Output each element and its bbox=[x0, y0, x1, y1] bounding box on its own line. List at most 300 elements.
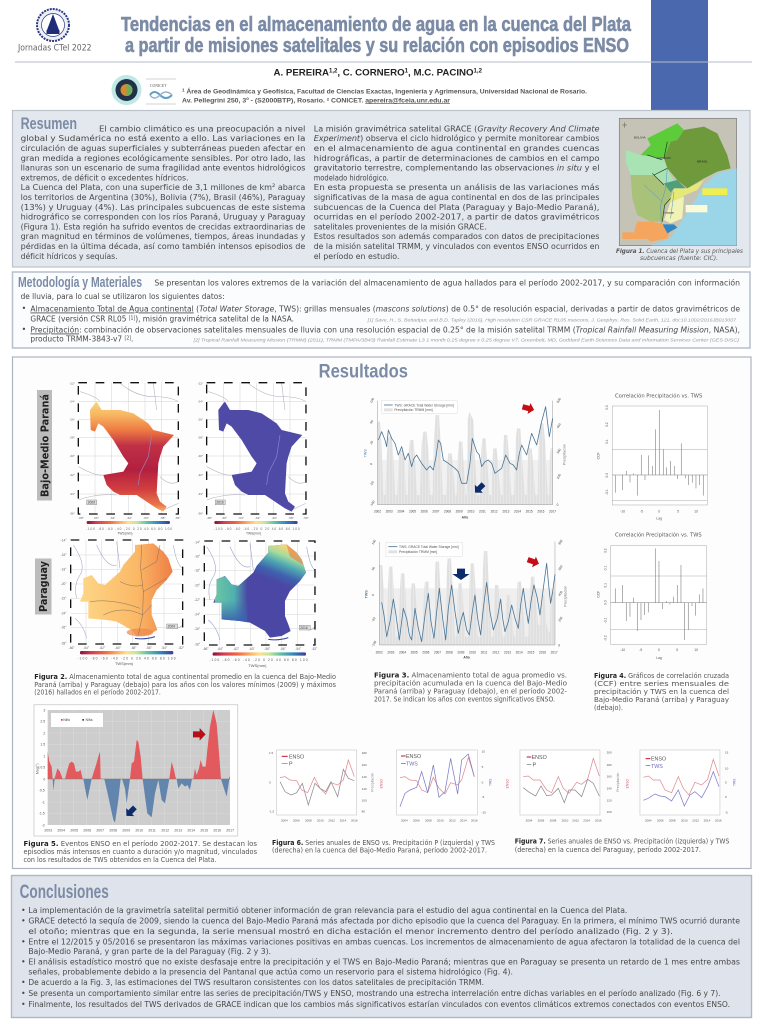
map: Paraguay 2009: -20° bbox=[61, 582, 67, 586]
map: Bajo-Medio Paraná 2009: -56° bbox=[175, 516, 181, 520]
chart: ENSO vs P Bajo-Medio Paraná: 180 bbox=[362, 751, 367, 755]
map: Bajo-Medio Paraná 2009: -100 -80 -60 -40 -20 0 20 40 60 80 100 bbox=[86, 527, 172, 531]
chart: figure 3 Paraguay: -100 bbox=[371, 640, 377, 647]
chart: ENSO vs TWS Bajo-Medio Paraná: 2012 bbox=[449, 819, 456, 823]
authors: , M.C. PACINO bbox=[408, 68, 474, 78]
chart: figure 5 ENSO events: 2015 bbox=[200, 828, 208, 832]
panel: Conclusiones bbox=[12, 876, 752, 1018]
text column 2: ocurridas en el período 2002-2017, a partir de datos gravimétricos bbox=[314, 212, 600, 222]
chart: figure 3 Paraguay: 2017 bbox=[551, 650, 558, 654]
TWS axis labels for the upper maps bbox=[117, 532, 261, 536]
map: Paraguay 2016: -22° bbox=[194, 598, 201, 602]
map: Bajo-Medio Paraná 2016: -22° bbox=[198, 381, 204, 385]
caption: figure 7 bbox=[515, 837, 730, 854]
legend bbox=[386, 542, 462, 557]
map: Bajo-Medio Paraná 2016: -66° bbox=[222, 516, 228, 520]
chart: figure 4 Bajo-Medio Paraná: 5 bbox=[677, 509, 679, 513]
chart: ENSO vs P Bajo-Medio Paraná: 160 bbox=[362, 763, 367, 767]
caption: figure 3: 2017. Se indican los años con eventos significativos ENSO. bbox=[374, 694, 555, 704]
map: Paraguay 2009: -22° bbox=[61, 597, 67, 601]
chart: ENSO vs TWS Bajo-Medio Paraná: 2014 bbox=[460, 819, 467, 823]
chart: figure 4 Bajo-Medio Paraná: 10 bbox=[694, 509, 698, 513]
heading: Resumen: Resumen bbox=[21, 114, 77, 133]
chart: figure 3 Paraguay: 200 bbox=[557, 616, 564, 622]
chart: figure 4 Bajo-Medio Paraná: 0.3 bbox=[605, 405, 609, 410]
map: Bajo-Medio Paraná 2009: -22° bbox=[69, 381, 76, 385]
chart: figure 3 Paraguay: -50 bbox=[371, 616, 377, 622]
chart: ENSO vs TWS Bajo-Medio Paraná: TWS bbox=[406, 761, 418, 767]
chart: ENSO vs P Bajo-Medio Paraná: 1.5 bbox=[269, 751, 273, 755]
chart: figure 5 ENSO events: 2011 bbox=[148, 828, 156, 832]
chart: ENSO vs P Paraguay: 2016 bbox=[595, 819, 602, 823]
map: Paraguay 2016: -24° bbox=[194, 613, 201, 617]
panel: Resultados bbox=[12, 357, 751, 868]
chart: figure 4 Paraguay: -0.1 bbox=[604, 617, 608, 623]
chart: figure 3 Paraguay: 0 bbox=[371, 593, 375, 597]
chart: ENSO vs P Bajo-Medio Paraná: 80 bbox=[362, 810, 365, 814]
chart: ENSO vs P Paraguay: 160 bbox=[607, 774, 612, 778]
title: Tendencias en el almacenamiento de agua en la cuenca del Plata bbox=[121, 14, 632, 36]
chart: figure 5 ENSO events: 2005 bbox=[70, 828, 78, 832]
bullet list: conclusions: • bbox=[21, 958, 26, 967]
affiliation: Av. Pellegrini 250, 3º - (S2000BTP), Rosario. ² CONICET. apereira@fceia.unr.edu.ar bbox=[182, 97, 450, 104]
chart: figure 3 Paraguay: 2005 bbox=[411, 650, 418, 654]
text column 1: (Figura 1). Esta región ha sufrido eventos de crecidas extraordinarias de bbox=[21, 221, 305, 231]
chart: ENSO vs P Bajo-Medio Paraná: P bbox=[289, 762, 293, 768]
legend: Precipitación TRMM [mm] bbox=[399, 550, 437, 554]
references: [1] Save, H., S. Bettadpur, and B.D. Tapley (2016), High resolution CSR GRACE RL05 mascons, J. Geophys. Res. Solid Earth, 121, doi:10.1002/2016JB013007 bbox=[366, 318, 736, 322]
map: Paraguay 2009: -54° bbox=[161, 646, 168, 650]
chart: ENSO vs TWS Paraguay: 2006 bbox=[657, 819, 664, 823]
chart: ENSO vs TWS Paraguay: ENSO bbox=[625, 778, 629, 788]
map: Bajo-Medio Paraná 2016: -100 -80 -60 -40 -20 0 20 40 60 80 100 bbox=[214, 527, 300, 531]
chart: figure 3 Paraguay: 2014 bbox=[516, 650, 523, 654]
chart: figure 3 Bajo-Medio Paraná: 2004 bbox=[397, 510, 405, 514]
legend: Niño bbox=[63, 718, 70, 722]
blue block at top right bbox=[651, 0, 708, 110]
chart: ENSO vs TWS Bajo-Medio Paraná: ENSO bbox=[406, 754, 421, 760]
map: Paraguay 2016: -100 -80 -60 -40 -20 0 20 40 60 80 100 bbox=[209, 658, 308, 662]
map: Paraguay 2009: -64° bbox=[83, 646, 90, 650]
heading: Resultados: Resultados bbox=[319, 362, 408, 382]
chart: figure 5 ENSO events: -0.5 bbox=[39, 789, 45, 793]
chart: figure 3 Bajo-Medio Paraná: 300 bbox=[556, 448, 562, 454]
map: Paraguay 2016: -26° bbox=[194, 627, 201, 631]
arrow: La Niña bbox=[122, 803, 139, 820]
chart: figure 3 Paraguay: 2009 bbox=[457, 650, 465, 654]
chart: figure 5 ENSO events: 1 bbox=[43, 754, 45, 758]
text column 1: extremos, de déficit o excedentes hídricos. bbox=[21, 172, 189, 182]
map: Bajo-Medio Paraná 2009: -30° bbox=[69, 454, 76, 458]
chart: figure 3 Bajo-Medio Paraná: 2011 bbox=[479, 510, 486, 514]
chart: ENSO vs TWS Paraguay: -5 bbox=[725, 810, 728, 814]
bullet list: data sources: Precipitación: combinación de observaciones satelitales mensuales de lluvia con una resolución espacial de 0.25° de la misión satelital TRMM (Tropical Rainfall Measuring Mission, NASA), bbox=[30, 324, 740, 334]
chart: ENSO vs P Paraguay: 2014 bbox=[583, 819, 590, 823]
title bbox=[121, 14, 632, 57]
text column 1: gran magnitud en términos de volúmenes, tiempos, áreas inundadas y bbox=[21, 231, 306, 241]
map: Paraguay 2016: -64° bbox=[217, 647, 224, 651]
bullet list: conclusions: • bbox=[21, 906, 26, 915]
map: Bajo-Medio Paraná 2016: -58° bbox=[288, 516, 295, 520]
map: Paraguay 2009: -14° bbox=[61, 539, 67, 543]
authors: A. PEREIRA bbox=[274, 68, 328, 78]
chart: figure 5 ENSO events: 0.5 bbox=[40, 766, 45, 770]
caption: figure 2: (2016) hallados en el período 2002-2017. bbox=[34, 688, 161, 697]
map: Paraguay 2009: -60° bbox=[115, 646, 122, 650]
intro text: Se presentan los valores extremos de la variación del almacenamiento de agua hallados para el período 2002-2017, y su comparación con información bbox=[154, 278, 740, 288]
map: Bajo-Medio Paraná 2016: -30° bbox=[198, 454, 204, 458]
map: Paraguay 2016: -58° bbox=[264, 647, 271, 651]
text column 1: (13%) y Uruguay (4%). Las principales subcuencas de este sistema bbox=[21, 202, 305, 212]
text column 2 bbox=[314, 123, 600, 261]
chart: figure 4 Paraguay: 0.1 bbox=[604, 566, 608, 570]
bullet list: data sources: [2] bbox=[125, 336, 131, 342]
chart: ENSO vs TWS Bajo-Medio Paraná: ENSO bbox=[379, 778, 383, 788]
chart: ENSO vs TWS Paraguay: 2010 bbox=[681, 819, 688, 823]
bullet list: data sources: Almacenamiento Total de Agua continental (Total Water Storage, TWS): grillas mensuales (mascons solutions) de 0.5° de resolución espacial, derivadas a partir de datos gravimétricos de bbox=[30, 304, 740, 314]
text column 2: significativas de la masa de agua continental en dos de las principales bbox=[314, 192, 600, 202]
chart: ENSO vs TWS Paraguay: 2012 bbox=[692, 819, 699, 823]
chart: figure 4 Paraguay: -5 bbox=[639, 648, 642, 652]
legend bbox=[51, 713, 103, 727]
arrow: minimum bbox=[452, 569, 470, 580]
chart: figure 3 Bajo-Medio Paraná: -50 bbox=[369, 480, 375, 486]
authors: 1,2 bbox=[474, 68, 483, 74]
chart: ENSO vs TWS Paraguay: 10 bbox=[725, 766, 729, 770]
chart: ENSO vs P Bajo-Medio Paraná bbox=[269, 750, 374, 823]
intro text: de lluvia, para lo cual se utilizaron los siguientes datos: bbox=[21, 291, 225, 301]
chart: ENSO vs P Bajo-Medio Paraná: 2010 bbox=[317, 819, 324, 823]
chart: figure 4 Bajo-Medio Paraná: 0 bbox=[658, 509, 660, 513]
arrow: maximum bbox=[526, 554, 541, 569]
text column 2: subcuencas de la Cuenca del Plata (Paraguay y Bajo-Medio Paraná), bbox=[314, 202, 600, 212]
map: Paraguay 2016: -62° bbox=[233, 647, 240, 651]
bullet list: conclusions: Se presenta un comportamiento similar entre las series de precipitación/TWS y ENSO, mostrando una estrecha interrelación entre dichas variables en el período analizado (Fig. 6 y 7). bbox=[28, 988, 721, 998]
chart: figure 3 Paraguay: 2011 bbox=[481, 650, 488, 654]
map: Paraguay 2016: 2016 bbox=[300, 626, 308, 630]
legend: TWS: GRACE Total Water Storage [mm] bbox=[394, 403, 454, 407]
chart: figure 3 Bajo-Medio Paraná: 2009 bbox=[456, 510, 463, 514]
chart: ENSO vs TWS Bajo-Medio Paraná: -5 bbox=[482, 795, 485, 799]
chart: figure 3 Bajo-Medio Paraná: 2005 bbox=[409, 510, 416, 514]
bullet list: data sources: producto TRMM-3843-v7 bbox=[30, 334, 131, 344]
chart: figure 3 Paraguay: 2007 bbox=[434, 650, 441, 654]
map: Paraguay 2009: 2009 bbox=[168, 625, 175, 629]
chart: figure 5 ENSO events: 2.5 bbox=[40, 720, 45, 724]
chart: figure 3 Bajo-Medio Paraná: 2003 bbox=[386, 510, 393, 514]
chart: figure 3 Bajo-Medio Paraná: 50 bbox=[369, 419, 374, 424]
heading: Conclusiones: Conclusiones bbox=[20, 882, 109, 903]
bullet list: conclusions: De acuerdo a la Fig. 3, las estimaciones del TWS resultaron consistentes con los datos satelitales de precipitación TRMM. bbox=[28, 977, 484, 987]
chart: ENSO vs P Bajo-Medio Paraná: 140 bbox=[362, 775, 367, 779]
chart: figure 3 Paraguay: 2002 bbox=[376, 650, 383, 654]
chart: figure 3 Bajo-Medio Paraná: 100 bbox=[369, 397, 375, 404]
chart: ENSO vs TWS Paraguay: TWS bbox=[733, 778, 737, 786]
chart: ENSO vs P Paraguay: 2006 bbox=[538, 819, 545, 823]
chart: ENSO vs P Paraguay: 200 bbox=[607, 750, 612, 754]
chart: figure 4 Bajo-Medio Paraná: 0.1 bbox=[605, 439, 609, 444]
caption: figure 1: subcuencas (fuente: CIC). bbox=[640, 254, 718, 262]
TWS axis labels for the upper maps: TWS(mm) bbox=[117, 532, 132, 536]
chart: figure 4 Bajo-Medio Paraná: CCF bbox=[596, 452, 600, 459]
text column 2: en el almacenamiento de agua continental en grandes cuencas bbox=[314, 143, 600, 153]
chart: ENSO vs P Paraguay: 2004 bbox=[526, 819, 533, 823]
chart: figure 3 Paraguay: 2010 bbox=[469, 650, 476, 654]
chart: figure 3 Bajo-Medio Paraná: 25 bbox=[369, 440, 374, 445]
legend: TWS: GRACE Total Water Storage [mm] bbox=[399, 545, 459, 549]
caption: figure 4 bbox=[594, 671, 730, 712]
caption: figure 6: Figura 6. Series anuales de ENSO vs. Precipitación P (izquierda) y TWS bbox=[272, 838, 495, 847]
chart: figure 5 ENSO events: 2004 bbox=[57, 828, 65, 832]
chart: figure 3 Paraguay: 2003 bbox=[387, 650, 395, 654]
chart: ENSO vs P Bajo-Medio Paraná: -1.5 bbox=[269, 810, 274, 814]
text column 1 bbox=[21, 123, 306, 261]
chart: figure 3 Paraguay: 2013 bbox=[504, 650, 511, 654]
chart: ENSO vs TWS Bajo-Medio Paraná: 5 bbox=[482, 765, 484, 769]
chart: ENSO vs P Paraguay bbox=[505, 750, 620, 823]
text column 1: déficit hídricos y sequías. bbox=[21, 251, 118, 261]
chart: figure 5 ENSO events bbox=[34, 705, 238, 836]
chart: figure 4 Bajo-Medio Paraná: 0.2 bbox=[605, 422, 609, 427]
chart: figure 5 ENSO events: 2009 bbox=[122, 828, 130, 832]
chart: ENSO vs P Paraguay: 2008 bbox=[550, 819, 557, 823]
chart: figure 4 Paraguay: -0.2 bbox=[604, 635, 608, 641]
logo: CONICET bbox=[146, 79, 176, 104]
chart: figure 3 Bajo-Medio Paraná: Año bbox=[462, 516, 468, 520]
chart: figure 4 Paraguay: 0.0 bbox=[604, 600, 608, 605]
chart: figure 3 Bajo-Medio Paraná: -100 bbox=[369, 499, 376, 507]
map: Cuenca del Plata sub-basins: Uruguay bbox=[664, 210, 675, 214]
chart: figure 4 Bajo-Medio Paraná: -0.1 bbox=[605, 489, 609, 495]
chart: figure 4 Paraguay: CCF bbox=[596, 591, 600, 598]
bullet list: conclusions: GRACE detectó la sequía de 2009, siendo la cuenca del Bajo-Medio Paraná más afectada por dicho episodio que la cuenca del Paraguay. En la primera, el mínimo TWS ocurrió durante bbox=[28, 916, 740, 926]
text column 1: los territorios de Argentina (30%), Bolivia (7%), Brasil (46%), Paraguay bbox=[21, 192, 306, 202]
map: Paraguay 2009: -58° bbox=[131, 646, 137, 650]
chart: figure 5 ENSO events: 2007 bbox=[96, 828, 104, 832]
map: Bajo-Medio Paraná 2009: -68° bbox=[78, 516, 85, 520]
map: Paraguay 2016: -60° bbox=[249, 647, 256, 651]
map: Bajo-Medio Paraná 2016: -26° bbox=[198, 417, 204, 421]
caption: figure 2: Paraná (arriba) y Paraguay (debajo) para los años con los valores mínimos (2009) y máximos bbox=[34, 680, 336, 689]
chart: ENSO vs P Bajo-Medio Paraná: 2014 bbox=[340, 819, 347, 823]
text column 2: hidrográficas, a partir de determinaciones de cambios en el campo bbox=[314, 153, 600, 163]
map: Bajo-Medio Paraná 2009: -36° bbox=[69, 511, 76, 515]
chart: ENSO vs P Paraguay: ENSO bbox=[505, 778, 509, 788]
chart: ENSO vs P Paraguay: 180 bbox=[607, 763, 612, 767]
chart: figure 4 Paraguay: Correlación Precipitación vs. TWS bbox=[615, 532, 702, 539]
map: Paraguay 2009: -62° bbox=[99, 646, 106, 650]
chart: figure 3 Bajo-Medio Paraná: Precipitación bbox=[562, 444, 566, 465]
chart: ENSO vs P Bajo-Medio Paraná: 2016 bbox=[351, 819, 358, 823]
chart: figure 4 Paraguay bbox=[596, 532, 707, 660]
bullet list: data sources: ), misión gravimétrica satelital de la NASA. bbox=[135, 314, 294, 324]
chart: figure 3 Paraguay: 2008 bbox=[446, 650, 453, 654]
map: Bajo-Medio Paraná 2016: -36° bbox=[198, 511, 204, 515]
chart: ENSO vs P Paraguay: 100 bbox=[607, 810, 612, 814]
map: Cuenca del Plata sub-basins bbox=[619, 118, 737, 246]
caption: figure 5: Figura 5. Eventos ENSO en el período 2002-2017. Se destacan los bbox=[24, 839, 257, 848]
authors: 1,2 bbox=[329, 68, 338, 74]
chart: ENSO vs TWS Paraguay: 15 bbox=[725, 750, 729, 754]
bullet list: data sources: . bbox=[131, 334, 133, 344]
chart: figure 3 Bajo-Medio Paraná: 0 bbox=[369, 462, 374, 466]
map: Paraguay 2016: -28° bbox=[194, 642, 201, 646]
chart: figure 5 ENSO events: 2003 bbox=[44, 828, 52, 832]
bullet list: data sources: [1] bbox=[129, 316, 135, 322]
map: Bajo-Medio Paraná 2016: -68° bbox=[207, 516, 213, 520]
chart: ENSO vs TWS Bajo-Medio Paraná bbox=[379, 750, 493, 823]
chart: figure 4 Paraguay: 5 bbox=[676, 648, 678, 652]
chart: figure 5 ENSO events: 2012 bbox=[161, 828, 169, 832]
text column 1: pérdidas en la última década, así como también intensos episodios de bbox=[21, 241, 305, 251]
map: Bajo-Medio Paraná 2009: -34° bbox=[69, 492, 76, 496]
chart: ENSO vs TWS Bajo-Medio Paraná: 2016 bbox=[471, 819, 478, 823]
map: Bajo-Medio Paraná 2009: -32° bbox=[69, 473, 76, 477]
chart: figure 4 Bajo-Medio Paraná: 0.0 bbox=[605, 473, 609, 478]
chart: ENSO vs P Bajo-Medio Paraná: 2006 bbox=[293, 819, 300, 823]
label: Paraguay bbox=[35, 558, 52, 614]
chart: figure 3 Paraguay: 2006 bbox=[422, 650, 430, 654]
chart: ENSO vs TWS Bajo-Medio Paraná: TWS bbox=[489, 778, 493, 786]
caption: figure 1: Figura 1. Cuenca del Plata y sus principales bbox=[616, 247, 744, 255]
chart: figure 5 ENSO events: 2013 bbox=[174, 828, 182, 832]
header bbox=[15, 9, 752, 105]
caption: figure 4: precipitación y TWS en la cuenca del bbox=[594, 687, 729, 696]
chart: figure 4 Bajo-Medio Paraná bbox=[596, 392, 707, 521]
bullet list: conclusions: Finalmente, los resultados del TWS derivados de GRACE indican que los cambios más significativos estarían vinculados con eventos climáticos extremos conectados con eventos ENSO. bbox=[28, 1000, 730, 1009]
bullet list: conclusions: • bbox=[21, 937, 26, 946]
chart: figure 4 Paraguay: 10 bbox=[694, 648, 698, 652]
chart: ENSO vs P Paraguay: 140 bbox=[607, 786, 612, 790]
chart: figure 4 Bajo-Medio Paraná: -10 bbox=[620, 509, 625, 513]
chart: ENSO vs TWS Paraguay: 2004 bbox=[645, 819, 652, 823]
chart: ENSO vs P Bajo-Medio Paraná: Precipitación bbox=[370, 772, 374, 792]
map: Bajo-Medio Paraná 2009: -64° bbox=[110, 516, 116, 520]
text column 1: gran medida a regiones ecológicamente sensibles. Por otro lado, las bbox=[21, 153, 305, 163]
bullet list: conclusions: Bajo-Medio Paraná, y gran parte de la del Paraguay (Fig. 2 y 3). bbox=[28, 947, 271, 956]
chart: figure 4 Paraguay: 0.2 bbox=[604, 548, 608, 553]
chart: ENSO vs P Bajo-Medio Paraná: 0 bbox=[269, 780, 271, 784]
bullet list: data sources: • bbox=[22, 324, 26, 334]
chart: figure 3 Bajo-Medio Paraná: 2017 bbox=[549, 510, 556, 514]
chart: figure 4 Paraguay: 0.1 bbox=[604, 583, 608, 588]
caption: figure 7: (derecha) en la cuenca del Paraguay, período 2002-2017. bbox=[515, 845, 701, 854]
map: Bajo-Medio Paraná 2009: -58° bbox=[160, 516, 166, 520]
chart: figure 5 ENSO events: 1.5 bbox=[40, 743, 45, 747]
map: Paraguay 2009: -56° bbox=[146, 646, 153, 650]
heading: Metodología y Materiales: Metodología y Materiales bbox=[18, 274, 142, 291]
chart: figure 3 Paraguay: 800 bbox=[557, 539, 564, 545]
bullet list: conclusions bbox=[21, 905, 740, 1009]
caption: figure 4: (CCF) entre series mensuales de bbox=[594, 679, 730, 688]
chart: ENSO vs P Bajo-Medio Paraná: 2004 bbox=[281, 819, 288, 823]
map: Bajo-Medio Paraná 2016: -64° bbox=[238, 516, 245, 520]
maps: Paraguay TWS 2009 and 2016 bbox=[61, 532, 320, 668]
chart: figure 3 Bajo-Medio Paraná: 2002 bbox=[374, 510, 381, 514]
bullet list: conclusions: La implementación de la gravimetría satelital permitió obtener información de gran relevancia para el estudio del agua continental en la Cuenca del Plata. bbox=[28, 905, 627, 915]
caption: figure 4: (debajo). bbox=[594, 703, 623, 712]
map: Bajo-Medio Paraná 2009: -24° bbox=[69, 399, 76, 403]
map: Paraguay 2009: -16° bbox=[61, 553, 67, 557]
panel: Resumen bbox=[12, 110, 750, 267]
chart: figure 3 Bajo-Medio Paraná: 2008 bbox=[444, 510, 451, 514]
legend: Niña bbox=[86, 718, 93, 722]
chart: ENSO vs P Paraguay: 2010 bbox=[562, 819, 569, 823]
chart: ENSO vs TWS Paraguay bbox=[625, 750, 737, 823]
maps: Bajo-Medio Paraná TWS 2009 and 2016 bbox=[69, 381, 310, 531]
map: Paraguay 2016: -14° bbox=[194, 540, 201, 544]
label: Bajo-Medio Paraná: Bajo-Medio Paraná bbox=[40, 394, 52, 497]
chart: figure 3 Bajo-Medio Paraná: 200 bbox=[556, 473, 562, 480]
chart: figure 4 Bajo-Medio Paraná: -5 bbox=[640, 509, 643, 513]
map: Paraguay 2016: -56° bbox=[280, 647, 287, 651]
caption: figure 4: Bajo-Medio Paraná (arriba) y Paraguay bbox=[594, 695, 730, 704]
label: Paraguay: Paraguay bbox=[38, 561, 50, 612]
caption: figure 3: precipitación acumulada en la cuenca del Bajo-Medio bbox=[374, 678, 567, 688]
map: Paraguay 2009: -24° bbox=[61, 611, 67, 615]
chart: figure 4 Bajo-Medio Paraná: Lag bbox=[656, 517, 662, 521]
bullet list: conclusions: señales, probablemente debido a la presencia del Pantanal que actúa como un reservorio para el sistema hidrológico (Fig. 4). bbox=[28, 966, 513, 976]
bullet list: data sources: • bbox=[22, 303, 26, 313]
text column 1: La Cuenca del Plata, con una superficie de 3,1 millones de km² abarca bbox=[21, 182, 305, 192]
chart: ENSO vs TWS Bajo-Medio Paraná: 2010 bbox=[437, 819, 444, 823]
title: a partir de misiones satelitales y su relación con episodios ENSO bbox=[125, 35, 629, 57]
arrow: minimum bbox=[471, 480, 488, 497]
chart: ENSO vs P Bajo-Medio Paraná: 100 bbox=[362, 798, 367, 802]
caption: figure 5 bbox=[24, 839, 257, 864]
map: Bajo-Medio Paraná 2016: -28° bbox=[198, 436, 204, 440]
intro text bbox=[21, 278, 740, 301]
chart: ENSO vs P Paraguay: P bbox=[533, 762, 537, 768]
caption: figure 3: Paraná (arriba) y Paraguay (debajo), en el período 2002- bbox=[374, 686, 567, 696]
bullet list: conclusions: el otoño; mientras que en la segunda, la serie mensual mostró en dicha estación el menor incremento dentro del período analizado (Fig. 2 y 3). bbox=[28, 926, 673, 936]
affiliation: Área de Geodinámica y Geofísica, Facultad de Ciencias Exactas, Ingeniería y Agrimensura, Universidad Nacional de Rosario. bbox=[185, 86, 587, 96]
text column 1: circulación de aguas superficiales y subterráneas pueden afectar en bbox=[21, 143, 305, 153]
text column 2: satelitales provenientes de la misión GRACE. bbox=[314, 221, 487, 231]
chart: figure 3 Paraguay: 2016 bbox=[539, 650, 546, 654]
chart: figure 3 Paraguay: 0 bbox=[558, 643, 560, 647]
chart: figure 3 Bajo-Medio Paraná: 2012 bbox=[491, 510, 498, 514]
bullet list: data sources bbox=[22, 303, 740, 344]
text column 2: La misión gravimétrica satelital GRACE (Gravity Recovery And Climate bbox=[314, 123, 600, 133]
chart: ENSO vs P Paraguay: Precipitación bbox=[616, 772, 620, 792]
chart: figure 3 Bajo-Medio Paraná: TWS bbox=[364, 449, 368, 457]
map: Paraguay 2009: -100 -80 -60 -40 -20 0 20 40 60 80 100 bbox=[77, 656, 176, 660]
bullet list: conclusions: • bbox=[21, 916, 26, 926]
chart: ENSO vs TWS Paraguay: ENSO bbox=[651, 757, 666, 763]
chart: figure 5 ENSO events: -1.5 bbox=[39, 812, 45, 816]
chart: ENSO vs TWS Paraguay: 2008 bbox=[669, 819, 676, 823]
caption: figure 3 bbox=[374, 670, 567, 704]
affiliation: 1 bbox=[182, 88, 185, 92]
caption: figure 6 bbox=[272, 838, 495, 855]
map: Paraguay 2009 bbox=[61, 539, 185, 666]
map: Bajo-Medio Paraná 2009: 2009 bbox=[88, 501, 95, 505]
chart: ENSO vs TWS Paraguay: 5 bbox=[725, 780, 727, 784]
chart: figure 3 Bajo-Medio Paraná: 2013 bbox=[502, 510, 510, 514]
caption: figure 3: Figura 3. Almacenamiento total de agua promedio vs. bbox=[374, 670, 567, 680]
chart: ENSO vs TWS Bajo-Medio Paraná: 2006 bbox=[413, 819, 420, 823]
authors: , C. CORNERO bbox=[337, 68, 405, 78]
map: Bajo-Medio Paraná 2016: -34° bbox=[198, 492, 204, 496]
map: Paraguay 2016: -54° bbox=[295, 647, 302, 651]
map: Paraguay 2009: TWS(mm) bbox=[115, 661, 134, 666]
text column 2: gravitatorio terrestre, complementando las observaciones in situ y el bbox=[314, 163, 600, 173]
chart: ENSO vs TWS Bajo-Medio Paraná: 2004 bbox=[401, 819, 408, 823]
chart: figure 5 ENSO events: Mag(°) bbox=[35, 763, 39, 774]
chart: figure 3 Paraguay: 50 bbox=[371, 566, 376, 571]
map: Bajo-Medio Paraná 2009: -26° bbox=[69, 417, 76, 421]
